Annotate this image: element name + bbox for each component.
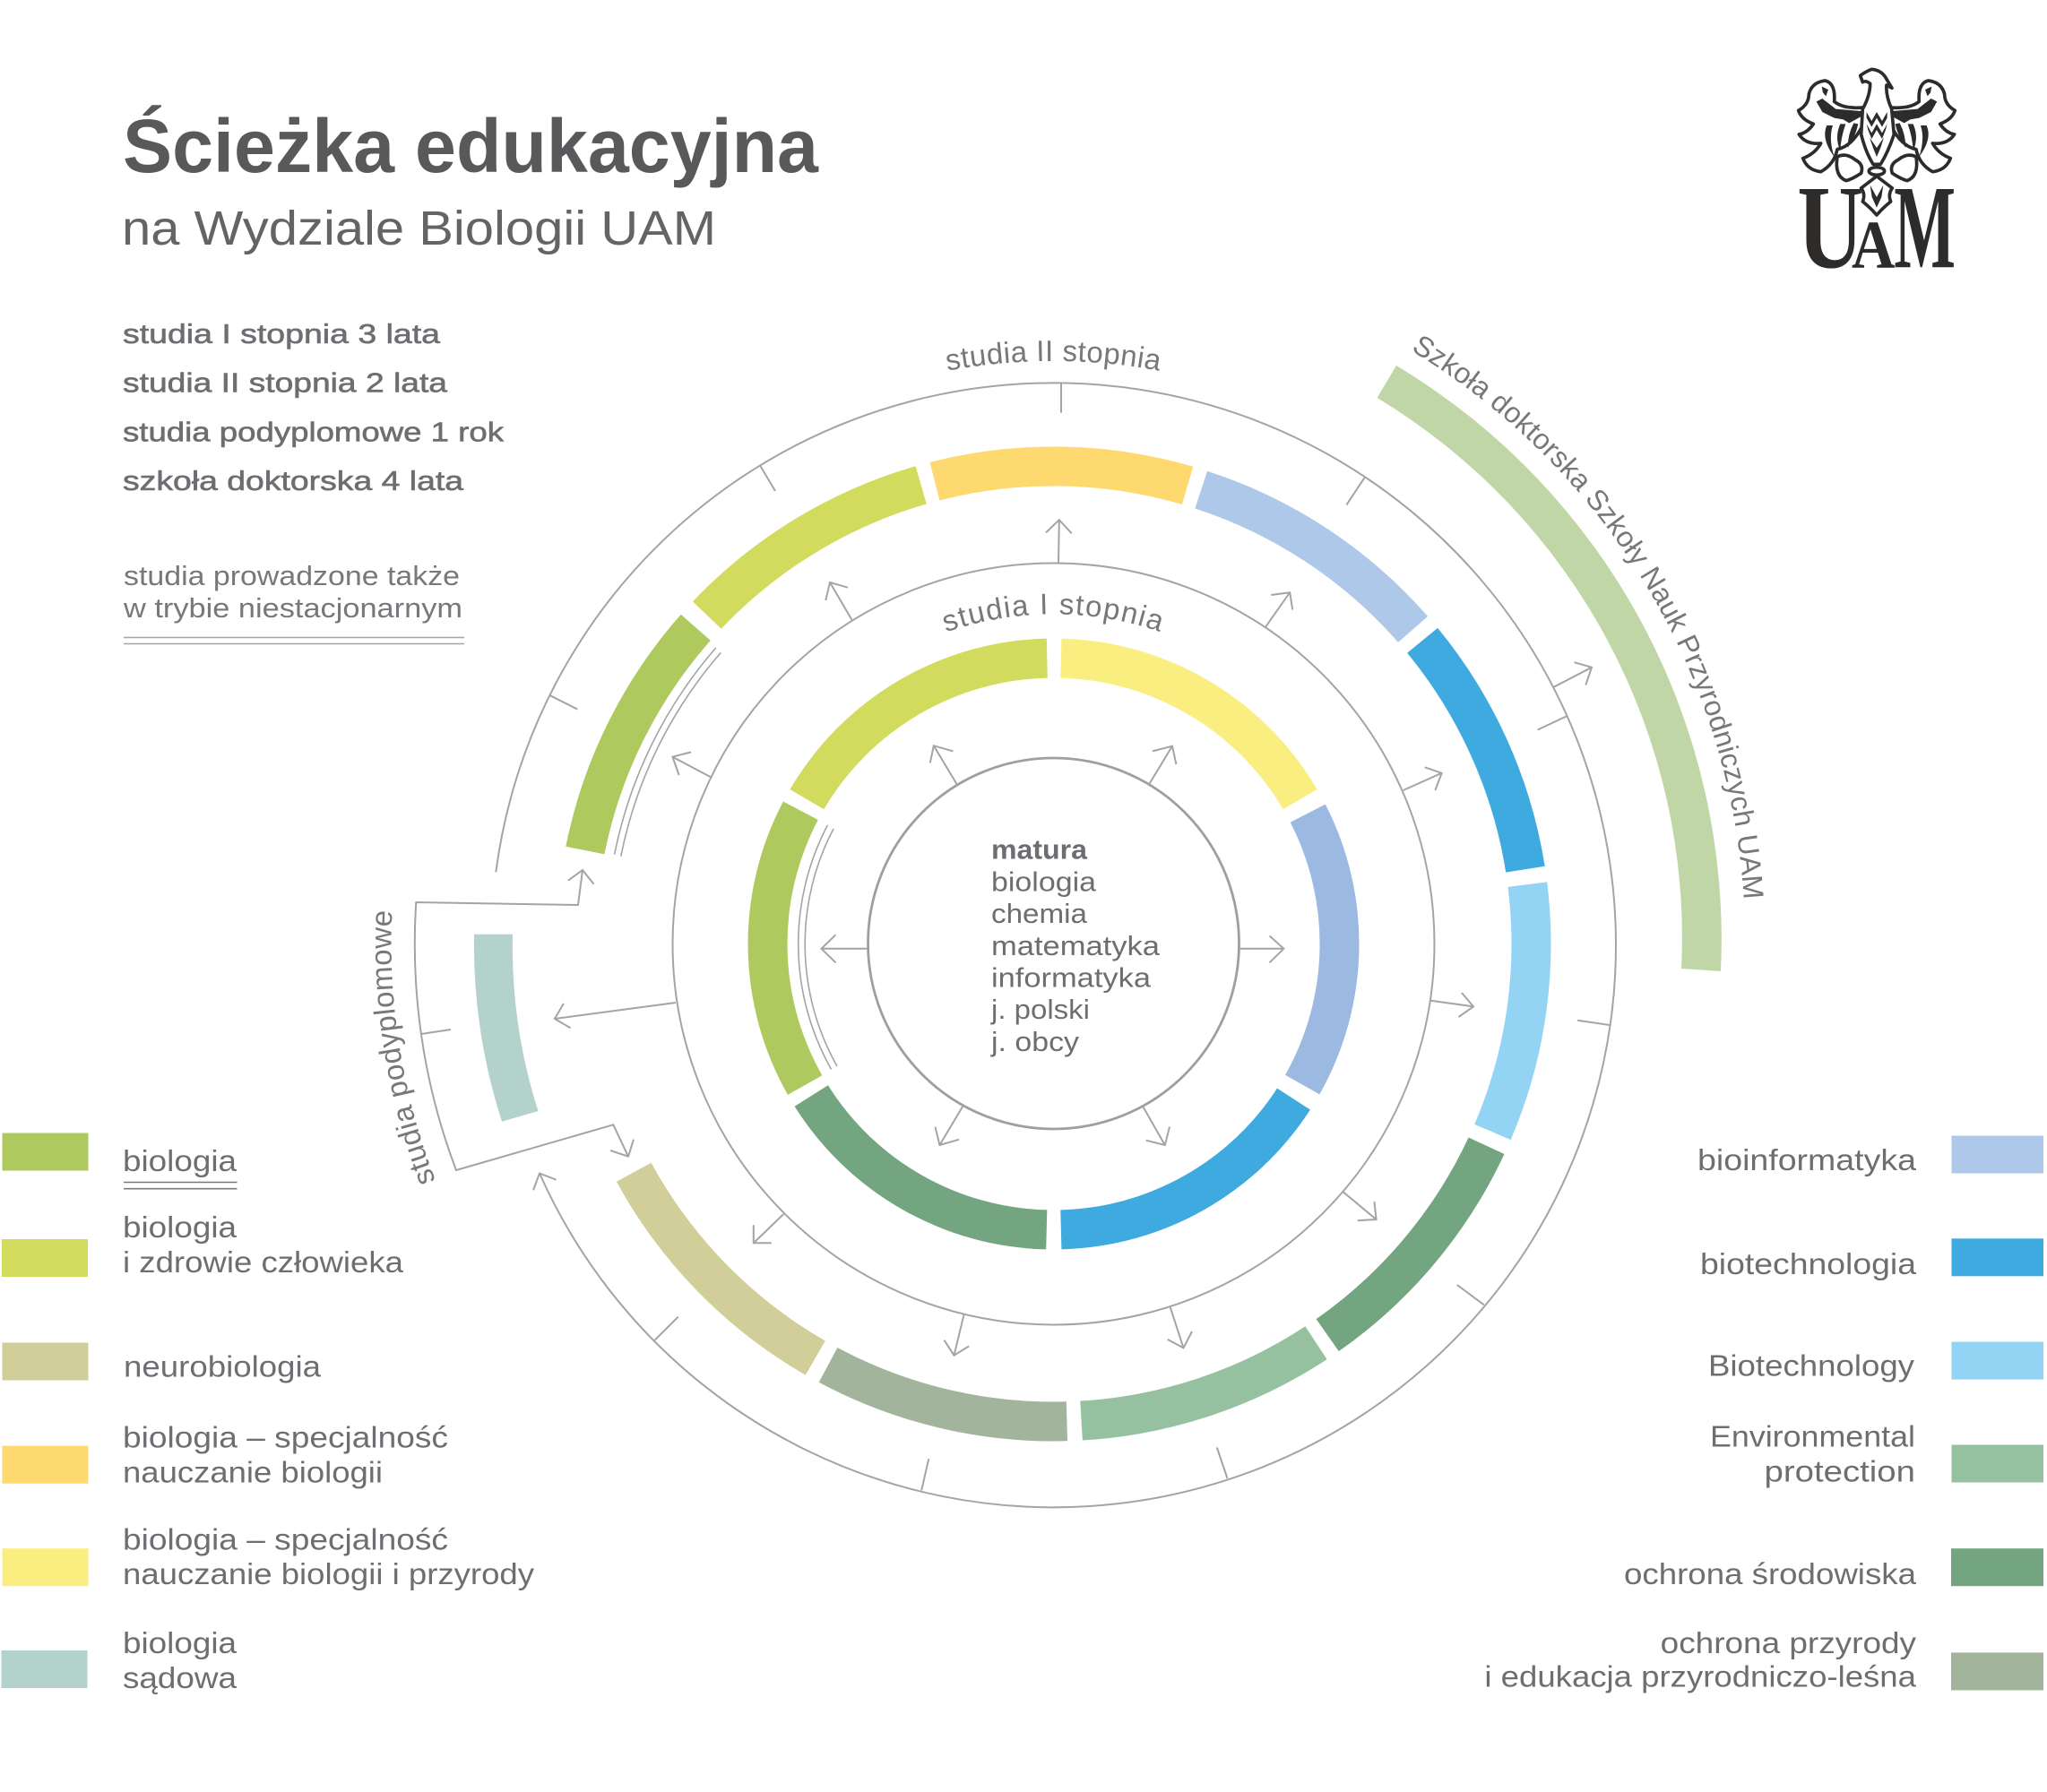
legend: left	[2, 1133, 535, 1694]
legend item: biologia: biologia	[123, 1144, 238, 1177]
legend item: nauczanie biologii i przyrody: nauczanie biologii i przyrody	[123, 1557, 535, 1590]
segment: biotechnologia	[1407, 628, 1545, 873]
legend item: nauczanie biologii	[2, 1420, 448, 1489]
logo letters: M	[1894, 160, 1956, 293]
duration list	[123, 318, 505, 496]
logo letters	[1797, 160, 1956, 293]
center text: matura subjects: biologia	[991, 866, 1097, 898]
postgraduate frame with arrows	[415, 870, 634, 1170]
legend item: biologia i zdrowie człowieka	[2, 1210, 404, 1279]
segment: bioinformatyka	[1195, 471, 1428, 642]
segment: Environmental protection	[1080, 1326, 1327, 1441]
center text: matura subjects: j. obcy	[990, 1026, 1080, 1057]
arrows from first-cycle ring	[555, 520, 1473, 1356]
segment: Biotechnology	[1474, 882, 1551, 1140]
legend item: ochrona środowiska	[1624, 1548, 2043, 1590]
ring: second-cycle arc with arrowhead	[496, 383, 1616, 1507]
ring label: doctoral school: Szkoła doktorska Szkoły Nauk Przyrodniczych UAM	[1414, 337, 1764, 898]
legend item: Environmental protection	[1710, 1420, 2043, 1488]
duration: doctoral: szkoła doktorska 4 lata	[123, 465, 464, 496]
legend item: ochrona przyrody i edukacja przyrodniczo-leśna	[1484, 1626, 2043, 1693]
title: Ścieżka edukacyjna	[123, 104, 819, 188]
segment: ochrona środowiska	[795, 1085, 1047, 1249]
part-time note with double rule: studia prowadzone także	[124, 560, 460, 591]
segment: nauczanie biologii	[930, 446, 1193, 504]
part-time note with double rule	[123, 560, 464, 643]
legend item: Environmental protection: Environmental	[1710, 1420, 1915, 1453]
logo letters: U	[1797, 160, 1863, 293]
segment: neurobiologia	[617, 1163, 825, 1375]
legend item: biotechnologia	[1700, 1238, 2043, 1280]
legend item: nauczanie biologii i przyrody: biologia – specjalność	[123, 1523, 448, 1555]
legend item: biologia i zdrowie człowieka: biologia	[123, 1210, 238, 1244]
legend item: nauczanie biologii: nauczanie biologii	[123, 1456, 383, 1489]
ring: first-cycle circle	[672, 563, 1434, 1324]
ring label: postgraduate: studia podyplomowe	[373, 911, 434, 1185]
duration: postgraduate: studia podyplomowe 1 rok	[123, 416, 505, 448]
part-time note with double rule: w trybie niestacjonarnym	[123, 592, 462, 624]
duration: first cycle: studia I stopnia 3 lata	[123, 318, 441, 349]
subtitle: na Wydziale Biologii UAM	[122, 202, 716, 255]
segment: biologia	[566, 615, 711, 854]
legend item: Biotechnology	[1708, 1342, 2043, 1382]
legend item: biologia	[2, 1133, 238, 1189]
icon: eagle	[1799, 69, 1955, 215]
legend item: biologia sądowa: biologia	[123, 1626, 238, 1659]
legend item: neurobiologia: neurobiologia	[124, 1350, 322, 1383]
legend item: Biotechnology: Biotechnology	[1708, 1349, 1915, 1382]
year ticks	[421, 383, 1610, 1490]
legend item: biologia sądowa	[2, 1626, 238, 1694]
diagram: education path rings	[373, 337, 1764, 1509]
center text: matura subjects: informatyka	[991, 962, 1152, 993]
legend item: nauczanie biologii: biologia – specjalność	[123, 1420, 448, 1453]
segment: doctoral school	[1378, 366, 1722, 971]
segment: biologia i zdrowie człowieka	[790, 639, 1048, 809]
center circle: matura	[868, 758, 1239, 1129]
center text: matura subjects: matematyka	[991, 930, 1161, 961]
segment: biologia i zdrowie człowieka	[693, 466, 927, 629]
duration: second cycle: studia II stopnia 2 lata	[123, 367, 448, 398]
center text: matura subjects	[990, 833, 1161, 1057]
segment: biotechnologia	[1060, 1089, 1310, 1249]
segment: bioinformatyka	[1285, 805, 1360, 1094]
inner ring segments	[748, 639, 1360, 1249]
legend item: biologia i zdrowie człowieka: i zdrowie człowieka	[123, 1245, 404, 1279]
arrows from center circle	[821, 745, 1283, 1145]
part-time double arcs	[615, 648, 837, 1070]
outer ring segments	[566, 446, 1551, 1442]
ring label: second cycle: studia II stopnia	[946, 340, 1160, 371]
segment: biologia sądowa	[474, 935, 538, 1122]
segment: nauczanie biologii i przyrody	[1060, 639, 1317, 809]
center text: matura subjects: j. polski	[990, 994, 1090, 1025]
legend item: ochrona środowiska: ochrona środowiska	[1624, 1557, 1917, 1590]
logo: UAM eagle and letters	[1797, 69, 1956, 293]
legend item: nauczanie biologii i przyrody	[2, 1523, 535, 1590]
ring label: first cycle: studia I stopnia	[943, 593, 1162, 632]
legend item: biotechnologia: biotechnologia	[1700, 1247, 1917, 1280]
legend item: bioinformatyka	[1697, 1136, 2043, 1176]
legend item: biologia sądowa: sądowa	[123, 1661, 238, 1694]
legend: right	[1484, 1136, 2043, 1693]
legend item: neurobiologia	[2, 1342, 322, 1383]
legend item: Environmental protection: protection	[1764, 1455, 1915, 1488]
legend item: ochrona przyrody i edukacja przyrodniczo-leśna: ochrona przyrody	[1661, 1626, 1917, 1659]
center text: matura subjects: chemia	[991, 898, 1088, 929]
logo letters: A	[1852, 207, 1895, 282]
legend item: bioinformatyka: bioinformatyka	[1697, 1143, 1917, 1176]
segment: ochrona przyrody	[819, 1348, 1067, 1442]
segment: ochrona środowiska	[1317, 1138, 1504, 1351]
legend item: ochrona przyrody i edukacja przyrodniczo-leśna: i edukacja przyrodniczo-leśna	[1484, 1660, 1917, 1693]
arrow to doctoral school	[1554, 662, 1592, 687]
center text: matura subjects: matura	[991, 833, 1088, 866]
segment: biologia	[748, 801, 822, 1095]
